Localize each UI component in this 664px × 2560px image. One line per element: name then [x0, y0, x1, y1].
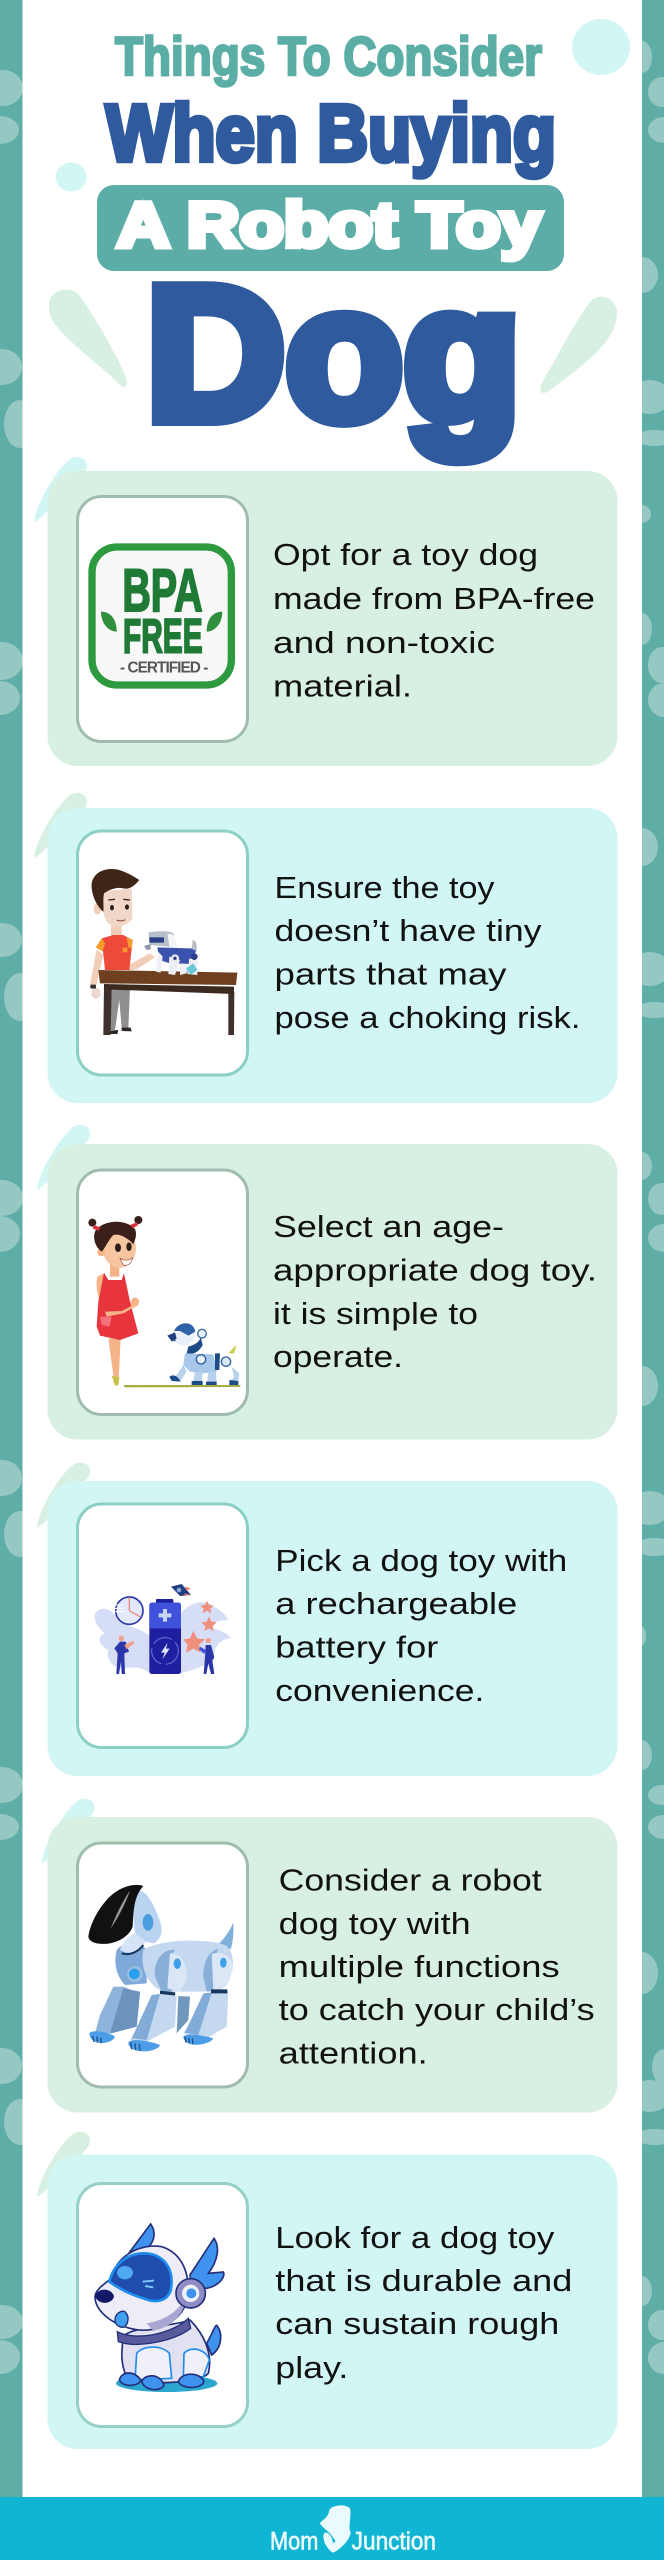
heading line: Dog: Dog: [146, 248, 521, 460]
panel: rechargeable battery: [37, 1463, 618, 1776]
left patterned border strip: [0, 0, 22, 2497]
card background: [48, 471, 618, 766]
icon: BPA free certified badge: - CERTIFIED -: [120, 659, 208, 676]
heading pill background: [97, 185, 564, 271]
illustration: boy with robot dog at table: [90, 869, 237, 1035]
drop accent: [37, 2132, 90, 2197]
text: multiple functions tip: multiple functions: [279, 1949, 560, 1984]
text: BPA-free tip: Opt for a toy dog: [273, 537, 538, 572]
text: battery tip: a rechargeable: [275, 1586, 517, 1621]
text: multiple functions tip: Consider a robot: [279, 1863, 542, 1898]
decoration: right green drop: [540, 297, 617, 393]
title: [97, 25, 564, 460]
image frame: [78, 831, 248, 1075]
panel: multiple functions: [42, 1799, 618, 2112]
decoration: left green drop: [49, 290, 127, 387]
text: durable toy tip: Look for a dog toy: [275, 2220, 555, 2255]
illustration: girl with robot dog: [88, 1216, 241, 1387]
illustration: puppy robot with visor: [95, 2224, 224, 2392]
text: BPA-free tip: material.: [273, 668, 412, 704]
heading line: When Buying: When Buying: [106, 88, 556, 178]
text: BPA-free tip: [273, 537, 595, 704]
card background: [48, 1817, 618, 2112]
text: multiple functions tip: attention.: [279, 2036, 428, 2070]
panel: choking risk: [34, 793, 618, 1103]
text: durable toy tip: that is durable and: [275, 2263, 572, 2298]
icon: BPA free certified badge: [92, 547, 231, 685]
text: choking risk tip: Ensure the toy: [274, 870, 495, 905]
logo: MomJunction: Junction: [352, 2528, 436, 2555]
text: durable toy tip: [275, 2220, 572, 2385]
drop accent: [42, 1799, 95, 1864]
card background: [48, 808, 618, 1103]
card background: [48, 1481, 618, 1776]
illustration: battery with people: [95, 1584, 231, 1674]
image frame: [78, 1504, 248, 1748]
text: choking risk tip: pose a choking risk.: [274, 1000, 580, 1035]
drop accent: [37, 1125, 90, 1190]
text: multiple functions tip: to catch your child’s: [279, 1992, 595, 2027]
text: battery tip: [275, 1543, 567, 1708]
text: age-appropriate tip: appropriate dog toy.: [273, 1252, 597, 1288]
footer bar: [0, 2497, 664, 2560]
text: age-appropriate tip: operate.: [273, 1339, 403, 1374]
right patterned border strip: [642, 0, 664, 2497]
illustration: blue robot dog: [88, 1885, 234, 2051]
panel: durable toy: [37, 2132, 618, 2449]
drop accent: [37, 1463, 90, 1528]
text: multiple functions tip: [279, 1863, 595, 2070]
text: multiple functions tip: dog toy with: [279, 1906, 471, 1941]
drop accent: [34, 793, 87, 858]
text: age-appropriate tip: Select an age-: [273, 1209, 504, 1244]
text: BPA-free tip: and non-toxic: [273, 625, 495, 660]
image frame: [78, 496, 248, 742]
text: durable toy tip: can sustain rough: [275, 2306, 559, 2341]
text: age-appropriate tip: [273, 1209, 597, 1374]
image frame: [78, 1170, 248, 1414]
image frame: [78, 2184, 248, 2426]
logo: MomJunction: Mom: [270, 2528, 318, 2555]
text: battery tip: convenience.: [275, 1673, 484, 1708]
text: BPA-free tip: made from BPA-free: [273, 581, 595, 616]
heading line: A Robot Toy: A Robot Toy: [117, 190, 541, 260]
text: age-appropriate tip: it is simple to: [273, 1296, 478, 1331]
card background: [48, 2154, 618, 2449]
icon: BPA free certified badge: FREE: [123, 610, 203, 664]
text: choking risk tip: doesn’t have tiny: [274, 913, 542, 948]
icon: BPA free certified badge: BPA: [122, 557, 203, 624]
decoration: small left circle: [56, 162, 86, 192]
panel: BPA-free material: [34, 457, 618, 766]
text: choking risk tip: parts that may: [274, 956, 507, 992]
panel: age-appropriate toy: [37, 1125, 618, 1440]
image frame: [78, 1843, 248, 2087]
card background: [48, 1144, 618, 1440]
text: battery tip: Pick a dog toy with: [275, 1543, 567, 1578]
text: battery tip: battery for: [275, 1630, 438, 1664]
text: durable toy tip: play.: [275, 2350, 348, 2385]
heading line: Things To Consider: Things To Consider: [115, 25, 542, 87]
text: choking risk tip: [274, 870, 580, 1035]
decoration: top right circle: [572, 19, 630, 75]
drop accent: [34, 457, 87, 522]
logo: MomJunction: [270, 2505, 436, 2555]
